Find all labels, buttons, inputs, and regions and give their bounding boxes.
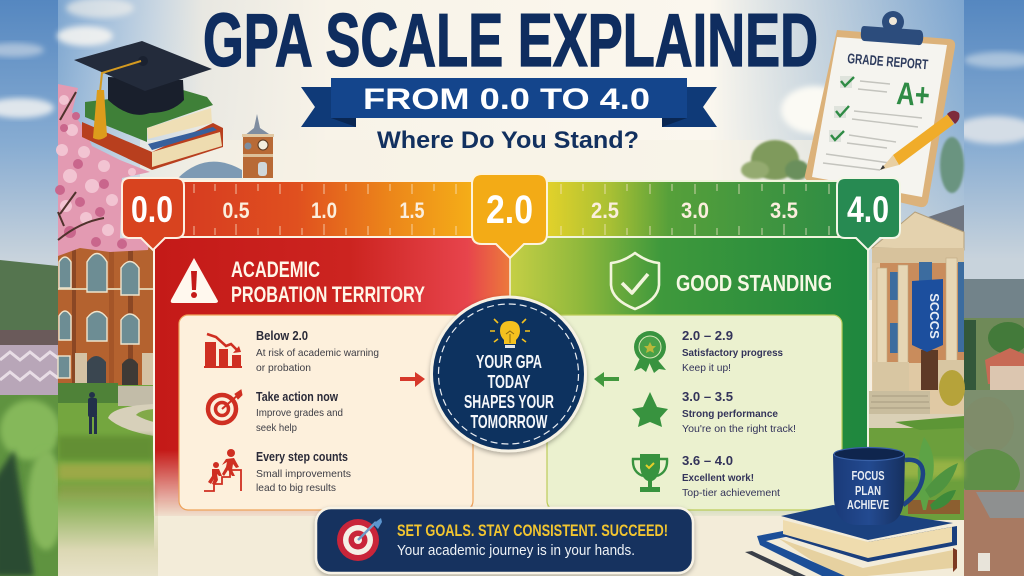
blue university banner: SCCCS — [927, 293, 942, 339]
centre gap below heading — [473, 315, 547, 511]
scale tick labels: 1.5 — [400, 198, 424, 223]
panel: academic probation — [153, 236, 510, 516]
right university building — [868, 205, 965, 520]
text: take action: Improve grades and — [256, 407, 343, 419]
right side strip landscape — [955, 0, 1024, 576]
central callout badge — [432, 297, 586, 451]
text: every step counts: lead to big results — [256, 482, 336, 494]
mortarboard — [74, 41, 212, 140]
graduation cap and books — [74, 41, 223, 170]
green book — [85, 90, 213, 142]
blue university banner — [912, 279, 943, 352]
pencil — [880, 111, 960, 170]
marker 2.0: 2.0 — [486, 188, 533, 232]
scale tick labels: 1.0 — [311, 198, 337, 223]
card: probation details — [179, 315, 473, 510]
text: 3.0 to 3.5 — [682, 389, 796, 435]
icon: light bulb — [490, 319, 530, 348]
panel: good standing — [509, 236, 869, 516]
warning triangle icon — [171, 258, 218, 303]
text: below 2.0: Below 2.0 — [256, 328, 308, 343]
text: 3.0 to 3.5: You're on the right track! — [682, 423, 796, 435]
text: below 2.0: At risk of academic warning — [256, 347, 379, 359]
scale tick labels: 2.5 — [591, 198, 619, 223]
scale tick labels: 0.5 — [222, 198, 250, 223]
text: 3.6 to 4.0: Excellent work! — [682, 472, 754, 484]
banner headline: SET GOALS. STAY CONSISTENT. SUCCEED! — [397, 521, 668, 540]
marker 2.0 — [472, 174, 547, 258]
lower book — [778, 538, 957, 576]
clock tower — [178, 114, 274, 178]
arrow: green pointing left — [594, 372, 619, 387]
text: below 2.0 — [256, 328, 379, 374]
callout text: YOUR GPA — [476, 352, 542, 372]
scale bar — [180, 181, 840, 237]
mug text: PLAN — [855, 483, 881, 498]
coffee mug — [833, 448, 923, 525]
mug text — [847, 468, 889, 512]
text: 3.6 to 4.0: 3.6 – 4.0 — [682, 453, 733, 468]
text: every step counts: Every step counts — [256, 449, 348, 464]
pen — [745, 551, 806, 576]
text: take action — [256, 389, 343, 434]
icon: rosette — [634, 331, 666, 373]
icon: trophy — [633, 454, 667, 492]
person on campus lawn — [88, 392, 97, 434]
blue bookmark band — [757, 531, 845, 576]
A plus grade: A+ — [896, 75, 931, 113]
cherry blossom tree — [55, 84, 150, 256]
text: 2.0 to 2.9: 2.0 – 2.9 — [682, 328, 733, 343]
upper book — [780, 505, 957, 562]
text: 3.6 to 4.0: Top-tier achievement — [682, 487, 780, 499]
callout text: SHAPES YOUR — [464, 392, 554, 412]
icon: climbing steps — [204, 449, 241, 491]
clipboard grade report — [805, 11, 955, 207]
icon: target — [208, 390, 242, 423]
scale tick labels: 3.5 — [770, 198, 798, 223]
scale tick labels: 3.0 — [681, 198, 709, 223]
shield check icon — [611, 253, 659, 309]
scale tick labels — [222, 198, 798, 223]
text: take action: Take action now — [256, 389, 339, 404]
text: every step counts — [256, 449, 351, 494]
left side strip landscape — [0, 0, 64, 576]
card: good standing details — [547, 315, 842, 510]
banner subline: Your academic journey is in your hands. — [397, 542, 635, 559]
plant and pot — [908, 437, 960, 514]
callout text: TOMORROW — [470, 412, 548, 432]
blue book — [148, 127, 217, 150]
checklist — [823, 76, 922, 170]
left campus building and lawn — [58, 238, 158, 576]
clip — [861, 11, 923, 45]
panel heading — [231, 257, 425, 307]
text: below 2.0: or probation — [256, 362, 311, 374]
arrow: red pointing right — [400, 372, 425, 387]
text: take action: seek help — [256, 422, 297, 434]
tagline: Where Do You Stand? — [377, 127, 639, 154]
bottom motivation banner — [316, 508, 693, 573]
panel heading: GOOD STANDING — [676, 270, 832, 296]
callout text — [464, 352, 554, 432]
panel heading: PROBATION TERRITORY — [231, 282, 425, 307]
panel heading: ACADEMIC — [231, 257, 320, 282]
icon: star — [632, 392, 668, 427]
text: 3.0 to 3.5: Strong performance — [682, 408, 778, 420]
icon: declining bars — [204, 334, 242, 368]
mug text: FOCUS — [852, 468, 885, 483]
text: 2.0 to 2.9: Satisfactory progress — [682, 347, 783, 359]
icon: bullseye with dart — [337, 518, 382, 561]
mug text: ACHIEVE — [847, 497, 889, 512]
text: 2.0 to 2.9: Keep it up! — [682, 362, 731, 374]
text: every step counts: Small improvements — [256, 468, 351, 480]
subtitle ribbon: FROM 0.0 TO 4.0 — [363, 83, 650, 116]
marker 4.0: 4.0 — [847, 189, 889, 230]
text: 3.0 to 3.5: 3.0 – 3.5 — [682, 389, 733, 404]
marker 4.0 — [837, 178, 900, 250]
subtitle ribbon — [301, 78, 717, 127]
text: 3.6 to 4.0 — [682, 453, 780, 499]
book stack with pen — [745, 505, 957, 576]
marker 0.0: 0.0 — [131, 189, 173, 230]
callout text: TODAY — [488, 372, 530, 392]
grade report heading: GRADE REPORT — [847, 50, 929, 72]
red book — [82, 122, 223, 170]
text: 2.0 to 2.9 — [682, 328, 783, 374]
marker 0.0 — [122, 178, 184, 250]
